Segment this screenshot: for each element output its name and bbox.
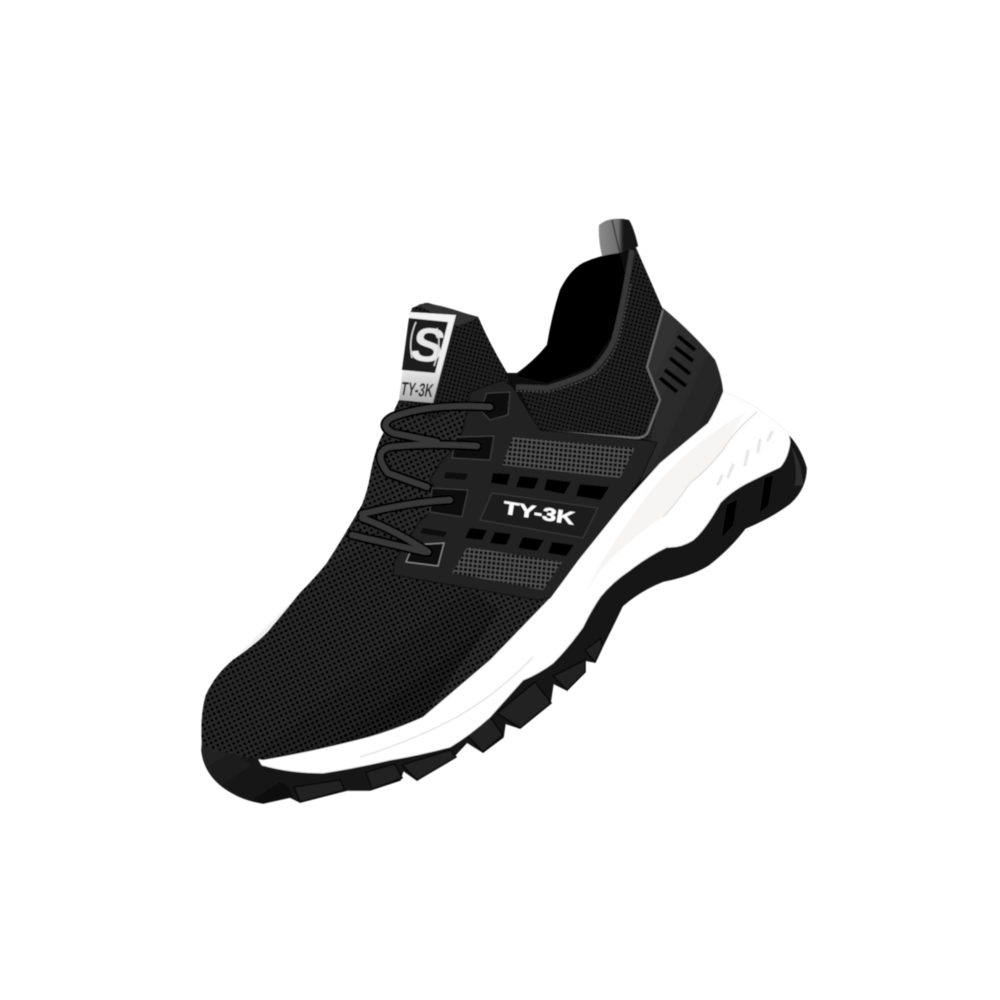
tongue edge <box>418 304 478 326</box>
outsole base <box>202 432 806 803</box>
lower grid panel <box>452 547 562 590</box>
shoe <box>202 219 806 803</box>
lace highlights <box>352 406 490 552</box>
tongue mesh <box>399 303 510 420</box>
heel counter <box>636 308 723 485</box>
midsole <box>258 392 790 773</box>
cage finger slots <box>420 472 468 537</box>
mesh body <box>202 390 550 760</box>
inner lining <box>517 253 625 383</box>
heel mesh panel <box>517 248 663 445</box>
lower windows <box>465 528 574 556</box>
brand label <box>399 312 456 403</box>
outsole <box>202 432 806 803</box>
shoelaces <box>352 406 490 552</box>
white foam <box>258 392 790 773</box>
label dark field <box>402 318 448 373</box>
logo ring <box>411 322 439 366</box>
toe mesh shading <box>202 530 500 760</box>
upper windows <box>491 473 609 500</box>
heel vents <box>660 336 695 392</box>
pull tab <box>599 219 638 258</box>
lace outlines <box>352 406 490 552</box>
tongue <box>399 303 510 420</box>
heel tread <box>722 476 773 537</box>
upper <box>202 248 723 760</box>
midsole groove upper <box>663 412 757 517</box>
midsole shade <box>585 412 745 595</box>
heel grey trim <box>540 310 663 438</box>
heel ribs <box>718 432 772 484</box>
brand plate <box>480 493 598 538</box>
cage body <box>393 380 657 600</box>
label text: TY-3K <box>399 379 435 402</box>
collar binding <box>516 250 632 388</box>
collar opening <box>516 250 632 392</box>
lace cage overlay <box>393 380 657 600</box>
logo S: S <box>405 317 450 373</box>
tread lugs <box>294 638 602 802</box>
eyelets <box>406 392 510 566</box>
toe cap <box>202 742 293 803</box>
label plate <box>399 312 456 403</box>
midsole groove lower <box>360 657 533 757</box>
brand name: TY-3K <box>502 498 576 529</box>
upper grid panel <box>502 437 635 478</box>
upper silhouette <box>202 248 723 760</box>
